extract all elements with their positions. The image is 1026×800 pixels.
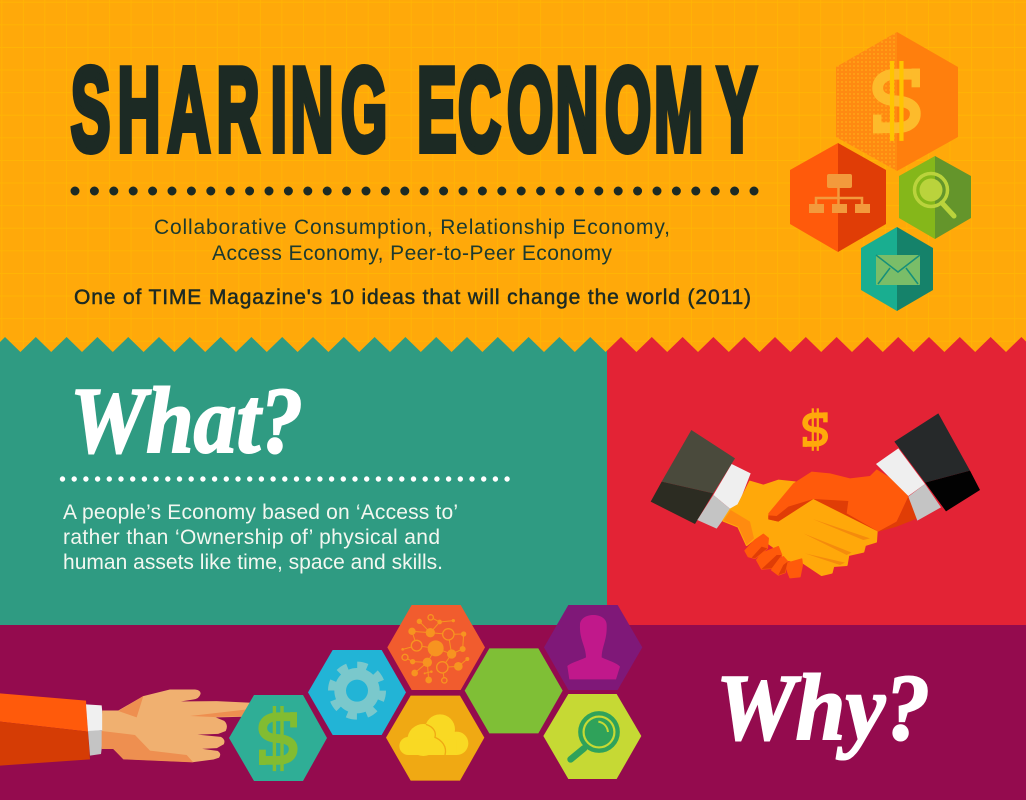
icon: org chart hexagon	[790, 143, 886, 252]
text block: what description: A people’s Economy based on ‘Access to’	[63, 501, 458, 524]
tagline: One of TIME Magazine's 10 ideas that will change the world (2011)	[74, 286, 751, 309]
heading: Why?: Why?	[716, 656, 930, 760]
text block: what description: human assets like time, space and skills.	[63, 551, 443, 574]
icon: person hexagon	[544, 605, 642, 690]
icon: pointing hand	[0, 690, 258, 766]
title: SHARING ECONOMY	[71, 43, 757, 176]
icon: blank green hexagon	[465, 648, 563, 733]
panel: what	[0, 337, 607, 625]
subtitle: Collaborative Consumption, Relationship Economy,	[154, 216, 670, 239]
icon: gear hexagon	[308, 650, 406, 735]
icon cluster: why hexagons	[308, 605, 642, 781]
icon: envelope hexagon	[861, 227, 933, 311]
subtitle	[154, 216, 670, 265]
subtitle: Access Economy, Peer-to-Peer Economy	[212, 242, 612, 265]
icon: magnifier hexagon	[543, 694, 641, 779]
icon: handshake with dollar	[651, 408, 980, 578]
panel: handshake	[607, 337, 1026, 625]
heading: What?: What?	[70, 369, 303, 473]
icon: dollar hexagon	[229, 695, 327, 781]
icon cluster: header hexagons	[790, 32, 971, 311]
icon: network hexagon	[387, 605, 485, 690]
icon: magnifier hexagon	[899, 156, 971, 239]
icon: dollar hexagon	[836, 32, 958, 171]
text block: what description	[63, 501, 458, 574]
panel: header background	[0, 0, 1026, 360]
text block: what description: rather than ‘Ownership of’ physical and	[63, 526, 440, 549]
panel: why	[0, 625, 1026, 800]
icon: cloud hexagon	[386, 696, 484, 781]
